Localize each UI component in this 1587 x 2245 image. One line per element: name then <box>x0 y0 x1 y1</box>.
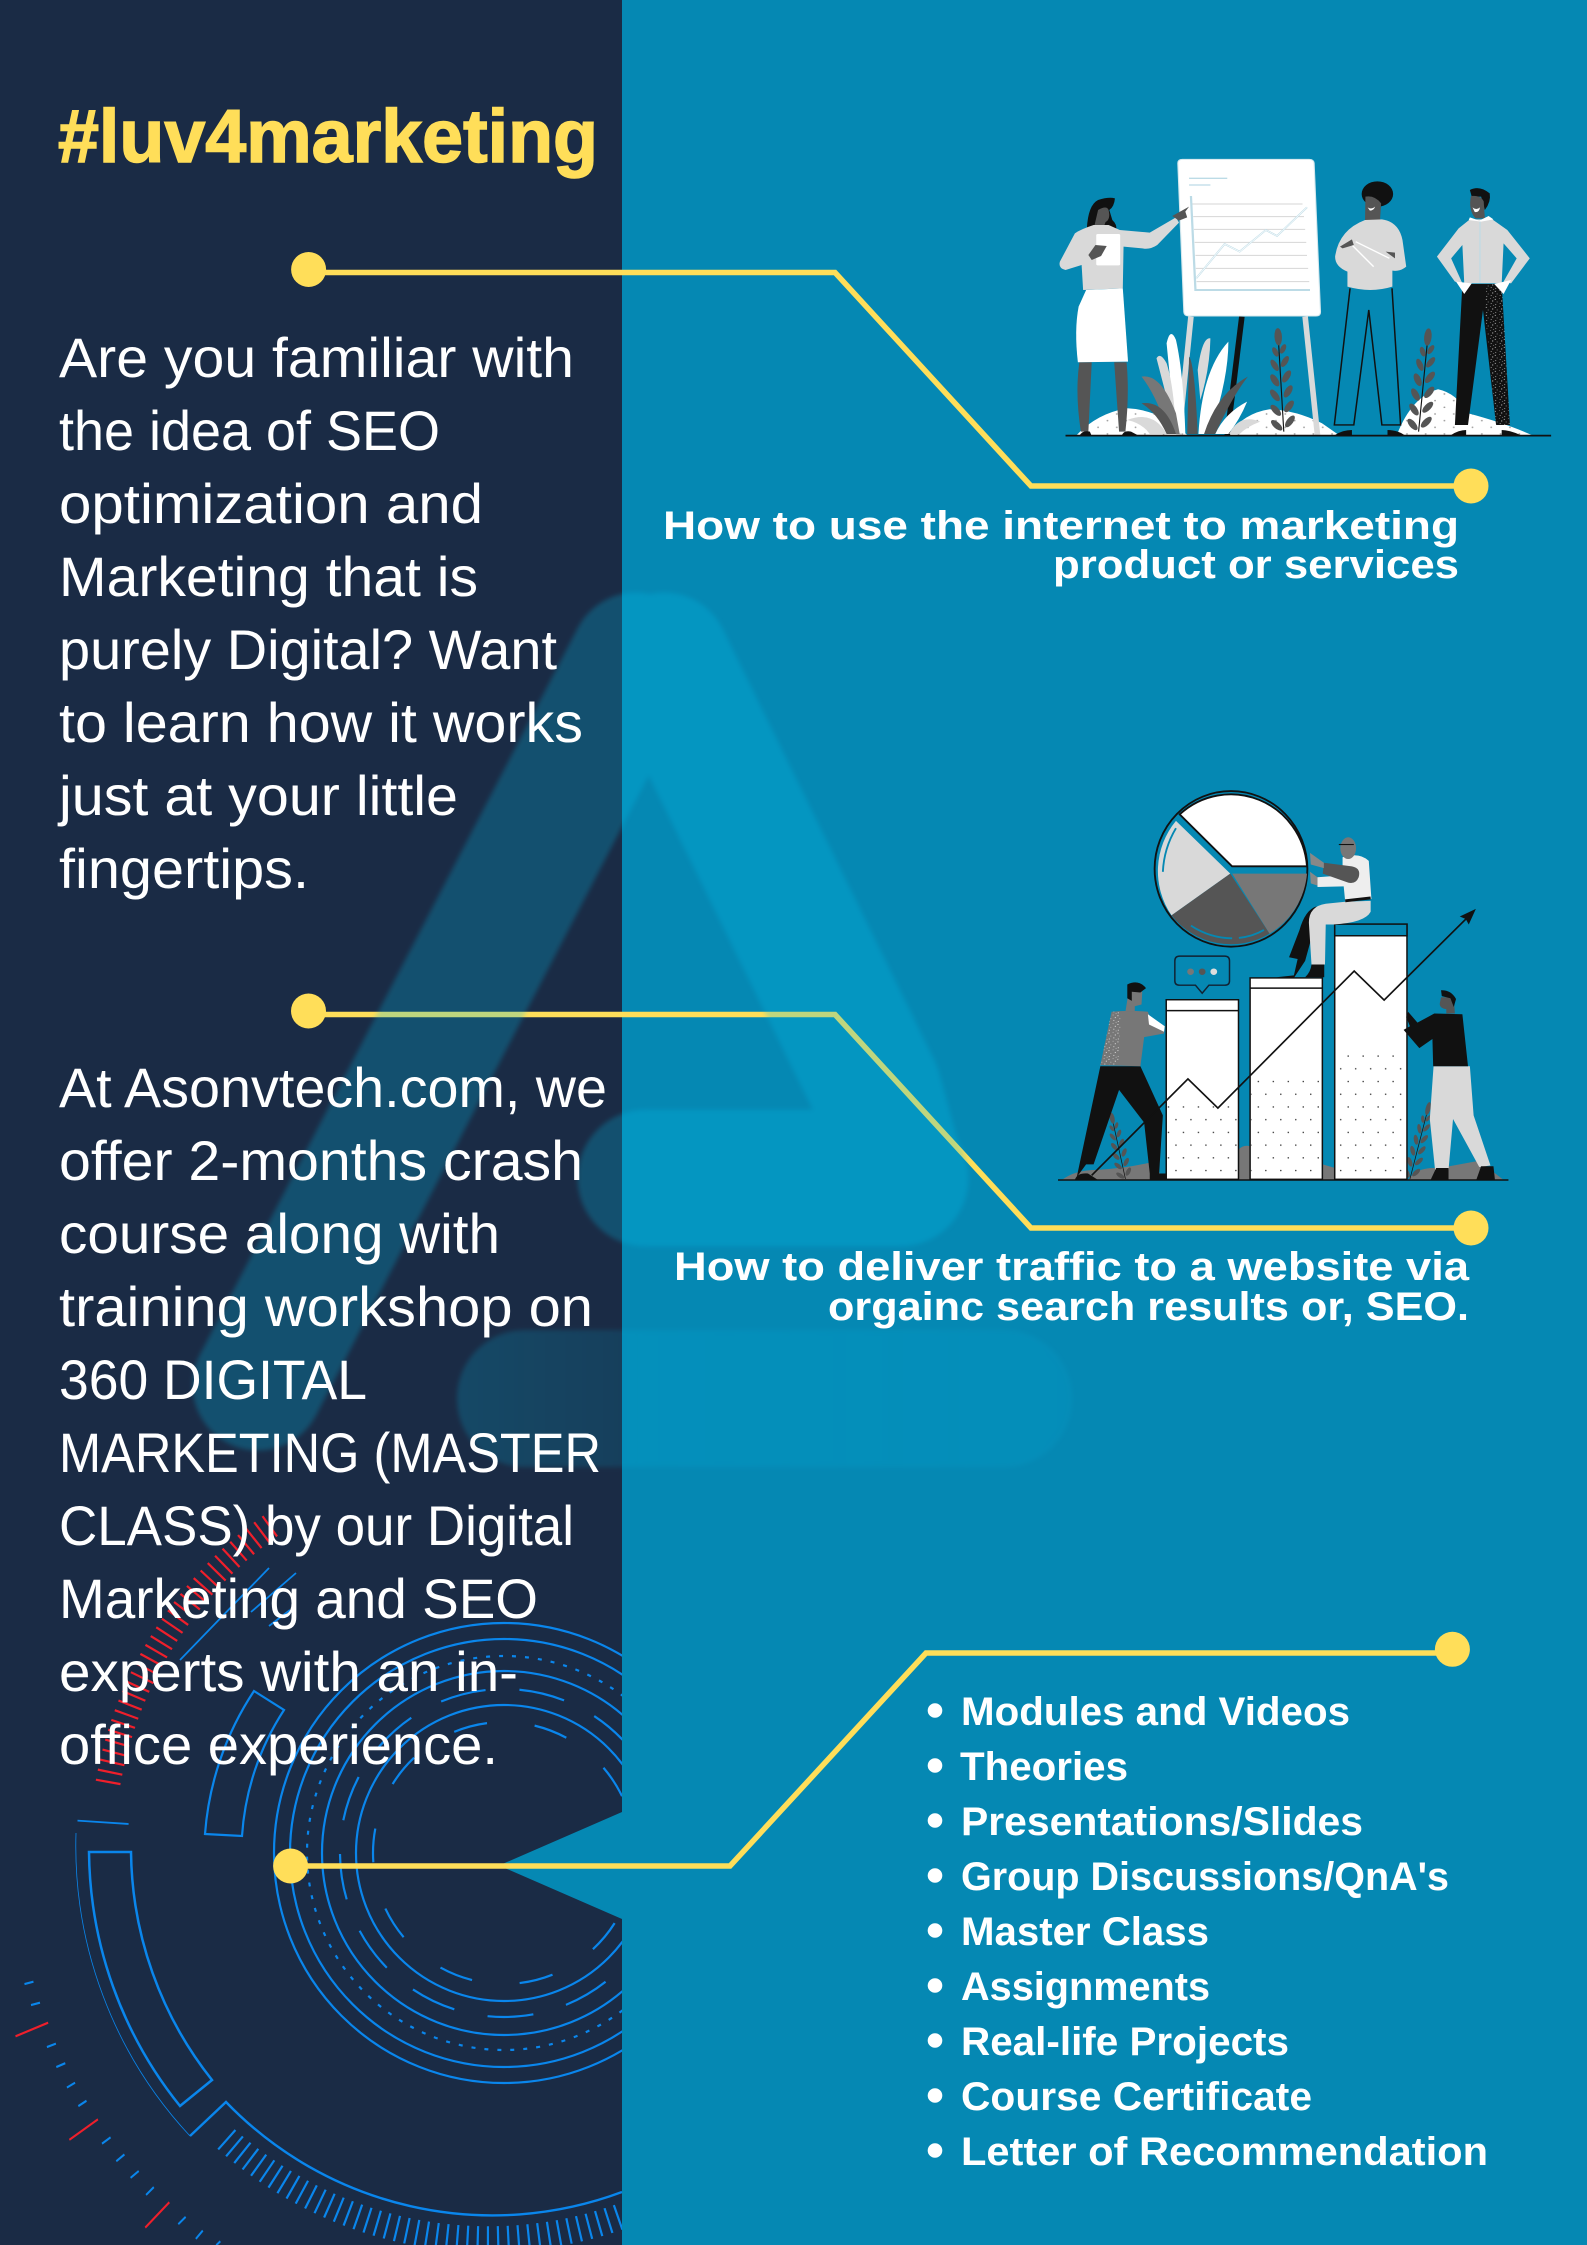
heading: SEO traffic: How to deliver traffic to a website via <box>674 1245 1470 1289</box>
text block: intro question: to learn how it works <box>59 691 583 754</box>
bar 3 <box>1335 924 1407 1179</box>
illustration: growth bars and pie chart <box>1058 791 1508 1181</box>
heading: internet marketing: How to use the internet to marketing <box>663 504 1459 548</box>
list item: Letter of Recommendation <box>961 2130 1488 2174</box>
bar 1 <box>1166 1000 1238 1179</box>
list item: Theories <box>960 1745 1128 1789</box>
list item: Master Class <box>961 1910 1209 1954</box>
heading: SEO traffic <box>674 1245 1470 1329</box>
list item: Assignments <box>961 1965 1210 2009</box>
text block: course offer: CLASS) by our Digital <box>59 1494 574 1557</box>
text block: intro question: Are you familiar with <box>59 326 574 389</box>
heading: SEO traffic: orgainc search results or, SEO. <box>828 1285 1469 1329</box>
fern right <box>1404 327 1442 433</box>
list item: Presentations/Slides <box>961 1800 1363 1844</box>
easel legs <box>1179 317 1317 435</box>
panel: teal right background with wedge <box>499 0 1587 2245</box>
text block: intro question: Marketing that is <box>59 545 478 608</box>
list item: Real-life Projects <box>961 2020 1289 2064</box>
standing man with crossed arms <box>1334 181 1406 435</box>
pushing man right <box>1404 990 1495 1180</box>
fern left <box>1264 327 1298 433</box>
standing man with hands on hips <box>1437 188 1530 435</box>
heading: internet marketing <box>663 504 1459 587</box>
text block: course offer: training workshop on <box>59 1275 593 1338</box>
text block: intro question: the idea of SEO <box>59 399 440 462</box>
text block: course offer: 360 DIGITAL <box>59 1348 367 1411</box>
list item: Group Discussions/QnA's <box>961 1855 1449 1899</box>
fern right <box>1401 1100 1438 1181</box>
technology dial decoration <box>15 1516 622 2245</box>
text block: course offer: office experience. <box>59 1713 498 1776</box>
illustration: presenters at flip chart <box>1060 159 1551 436</box>
panel: navy left background <box>0 0 622 2245</box>
text block: intro question: optimization and <box>59 472 483 535</box>
connector line 3 <box>273 1632 1470 1884</box>
text block: intro question: just at your little <box>57 764 458 827</box>
presenter woman <box>1060 198 1189 436</box>
hills <box>1077 389 1532 435</box>
text block: course offer: Marketing and SEO <box>59 1567 538 1630</box>
growth arrow <box>1092 909 1476 1175</box>
flip chart board <box>1178 159 1320 316</box>
text block: course offer: At Asonvtech.com, we <box>59 1056 607 1119</box>
title: #luv4marketing <box>58 94 598 178</box>
text block: course offer: experts with an in- <box>59 1640 518 1703</box>
ground line <box>1066 433 1551 438</box>
text block: intro question: purely Digital? Want <box>59 618 557 681</box>
list item: Course Certificate <box>961 2075 1312 2119</box>
fern left <box>1102 1111 1134 1181</box>
connector line 2 <box>291 994 1488 1246</box>
text block: intro question: fingertips. <box>59 837 309 900</box>
text block: intro question <box>57 326 583 900</box>
bar 2 <box>1250 978 1322 1179</box>
connector line 1 <box>291 252 1489 504</box>
text block: course offer <box>59 1056 607 1776</box>
mounds <box>1062 1146 1504 1180</box>
pushing man left <box>1075 982 1167 1180</box>
watermark logo A <box>258 658 1072 1467</box>
ground line <box>1058 1178 1508 1182</box>
course feature list <box>928 1690 1488 2174</box>
seated man <box>1276 837 1371 978</box>
heading: internet marketing: product or services <box>1053 543 1459 587</box>
text block: course offer: offer 2-months crash <box>59 1129 583 1192</box>
speech bubble <box>1175 956 1230 993</box>
plant <box>1127 334 1260 434</box>
list item: Modules and Videos <box>961 1690 1350 1734</box>
pie chart <box>1155 791 1307 947</box>
text block: course offer: course along with <box>59 1202 500 1265</box>
text block: course offer: MARKETING (MASTER <box>59 1421 601 1484</box>
